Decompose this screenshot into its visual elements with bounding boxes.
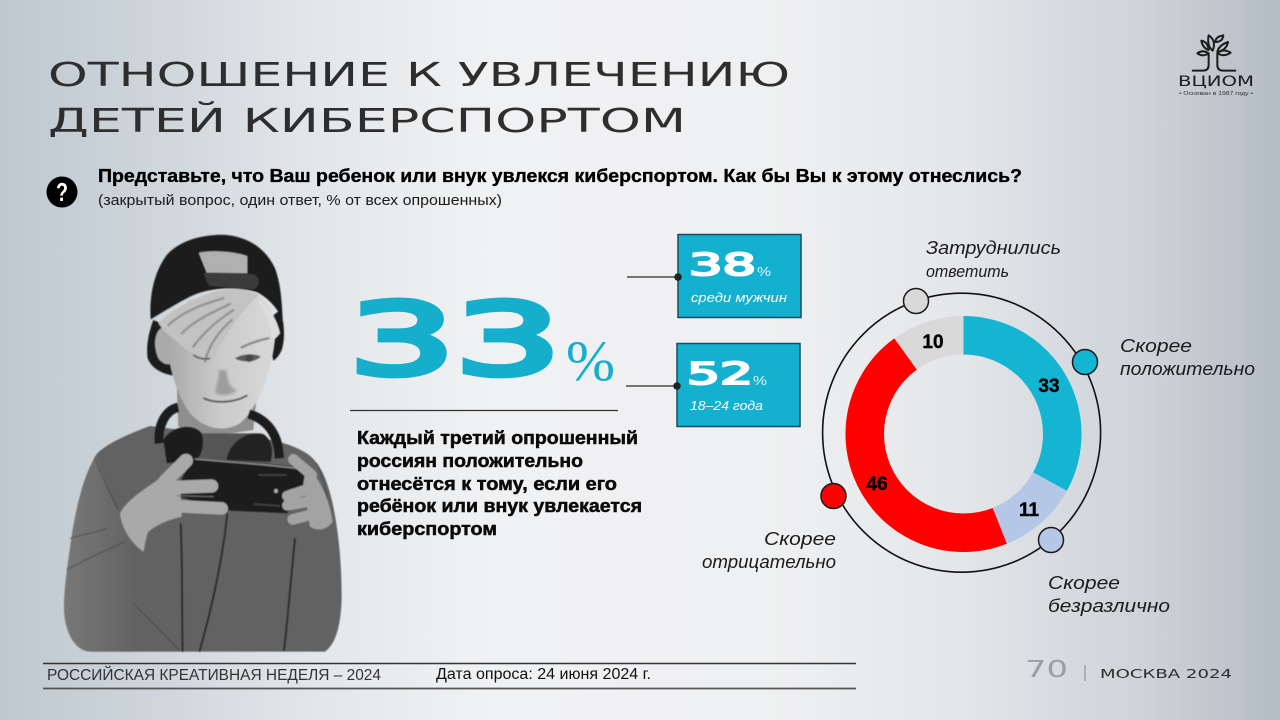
donut chart: [821, 288, 1101, 572]
legend label: rather positive: [1120, 336, 1255, 379]
callout text: киберспортом: [357, 519, 497, 539]
stat box: men 38%: среди мужчин: [691, 290, 787, 305]
question text: (закрытый вопрос, один ответ, % от всех опрошенных): [98, 192, 502, 209]
stat box: 18-24 years 52%: 18–24 года: [690, 398, 763, 413]
stat box: men 38%: [627, 234, 801, 318]
cap strap: [204, 273, 259, 289]
big number 33%: [349, 283, 615, 398]
segment values: 10: [922, 332, 944, 353]
callout text: ребёнок или внук увлекается: [357, 496, 642, 516]
stat box: men 38%: %: [757, 264, 772, 279]
title: ДЕТЕЙ КИБЕРСПОРТОМ: [48, 100, 686, 140]
page number and place: МОСКВА 2024: [1100, 666, 1232, 681]
outer ring: [823, 293, 1101, 572]
segment values: 33: [1038, 376, 1060, 397]
title: ОТНОШЕНИЕ К УВЛЕЧЕНИЮ: [48, 55, 790, 94]
lighter left sleeve: [64, 454, 136, 652]
question text: Представьте, что Ваш ребенок или внук увлекся киберспортом. Как бы Вы к этому отнеслись?: [98, 165, 1022, 186]
segment values: 46: [866, 474, 888, 495]
right hand: [287, 459, 333, 529]
legend label: difficult to answer: [926, 238, 1061, 281]
legend dots: [821, 288, 1098, 552]
callout text: Каждый третий опрошенный: [357, 428, 638, 448]
logo: VCIOM: [1178, 35, 1254, 97]
headphone band: [159, 407, 279, 458]
stat box: 18-24 years 52%: [626, 344, 800, 426]
legend label: rather positive: Скорее: [1120, 336, 1192, 356]
footer: [43, 664, 856, 688]
legend label: rather negative: [702, 529, 836, 572]
face shadows: [215, 370, 237, 395]
page number and place: [1025, 657, 1232, 683]
legend label: rather indifferent: безразлично: [1048, 596, 1170, 616]
legend label: difficult to answer: ответить: [926, 262, 1009, 281]
mouth: [204, 396, 247, 402]
title: [48, 55, 790, 140]
legend label: rather negative: Скорее: [764, 529, 836, 549]
segment values: 11: [1019, 500, 1039, 521]
icon: question mark: [46, 176, 78, 208]
neck: [177, 383, 257, 437]
legend label: rather positive: положительно: [1120, 359, 1255, 379]
callout text: [357, 428, 642, 539]
legend label: rather negative: отрицательно: [702, 552, 836, 572]
ear cups: [163, 427, 203, 463]
donut segments: [865, 335, 1062, 533]
stat box: 18-24 years 52%: %: [753, 373, 768, 388]
logo: VCIOM: ВЦИОМ: [1178, 74, 1254, 90]
icon: question mark: ?: [56, 177, 68, 207]
legend label: rather indifferent: [1048, 573, 1170, 616]
legend label: rather indifferent: Скорее: [1048, 573, 1120, 593]
eye and brow: [235, 354, 261, 361]
callout text: отнесётся к тому, если его: [357, 474, 617, 494]
question text: [98, 165, 1022, 209]
sweater folds: [67, 457, 328, 651]
footer: Дата опроса: 24 июня 2024 г.: [436, 666, 651, 683]
hair: [158, 289, 259, 366]
page number and place: 70: [1025, 657, 1068, 683]
back of cap visor: [147, 310, 284, 376]
headphone cables: [181, 513, 295, 652]
stat box: 18-24 years 52%: 52: [687, 357, 753, 392]
face: [165, 297, 275, 429]
ear: [155, 327, 175, 364]
divider under big number: [350, 410, 618, 412]
cap: [150, 235, 283, 319]
sweater collar: [197, 433, 270, 463]
big number 33%: %: [566, 330, 615, 393]
left hand: [120, 461, 222, 552]
photo: boy playing a handheld console: [64, 235, 342, 652]
legend label: difficult to answer: Затруднились: [926, 238, 1061, 258]
callout text: россиян положительно: [357, 451, 583, 471]
footer: РОССИЙСКАЯ КРЕАТИВНАЯ НЕДЕЛЯ – 2024: [47, 666, 381, 684]
segment values: [866, 332, 1060, 521]
cap hole with hair: [199, 251, 247, 273]
sweater: [64, 426, 342, 652]
big number 33%: 33: [349, 283, 561, 398]
game console: [178, 458, 307, 513]
hair streaks: [168, 298, 233, 362]
stat box: men 38%: 38: [689, 248, 756, 283]
logo: VCIOM: • Основан в 1987 году •: [1179, 91, 1253, 97]
